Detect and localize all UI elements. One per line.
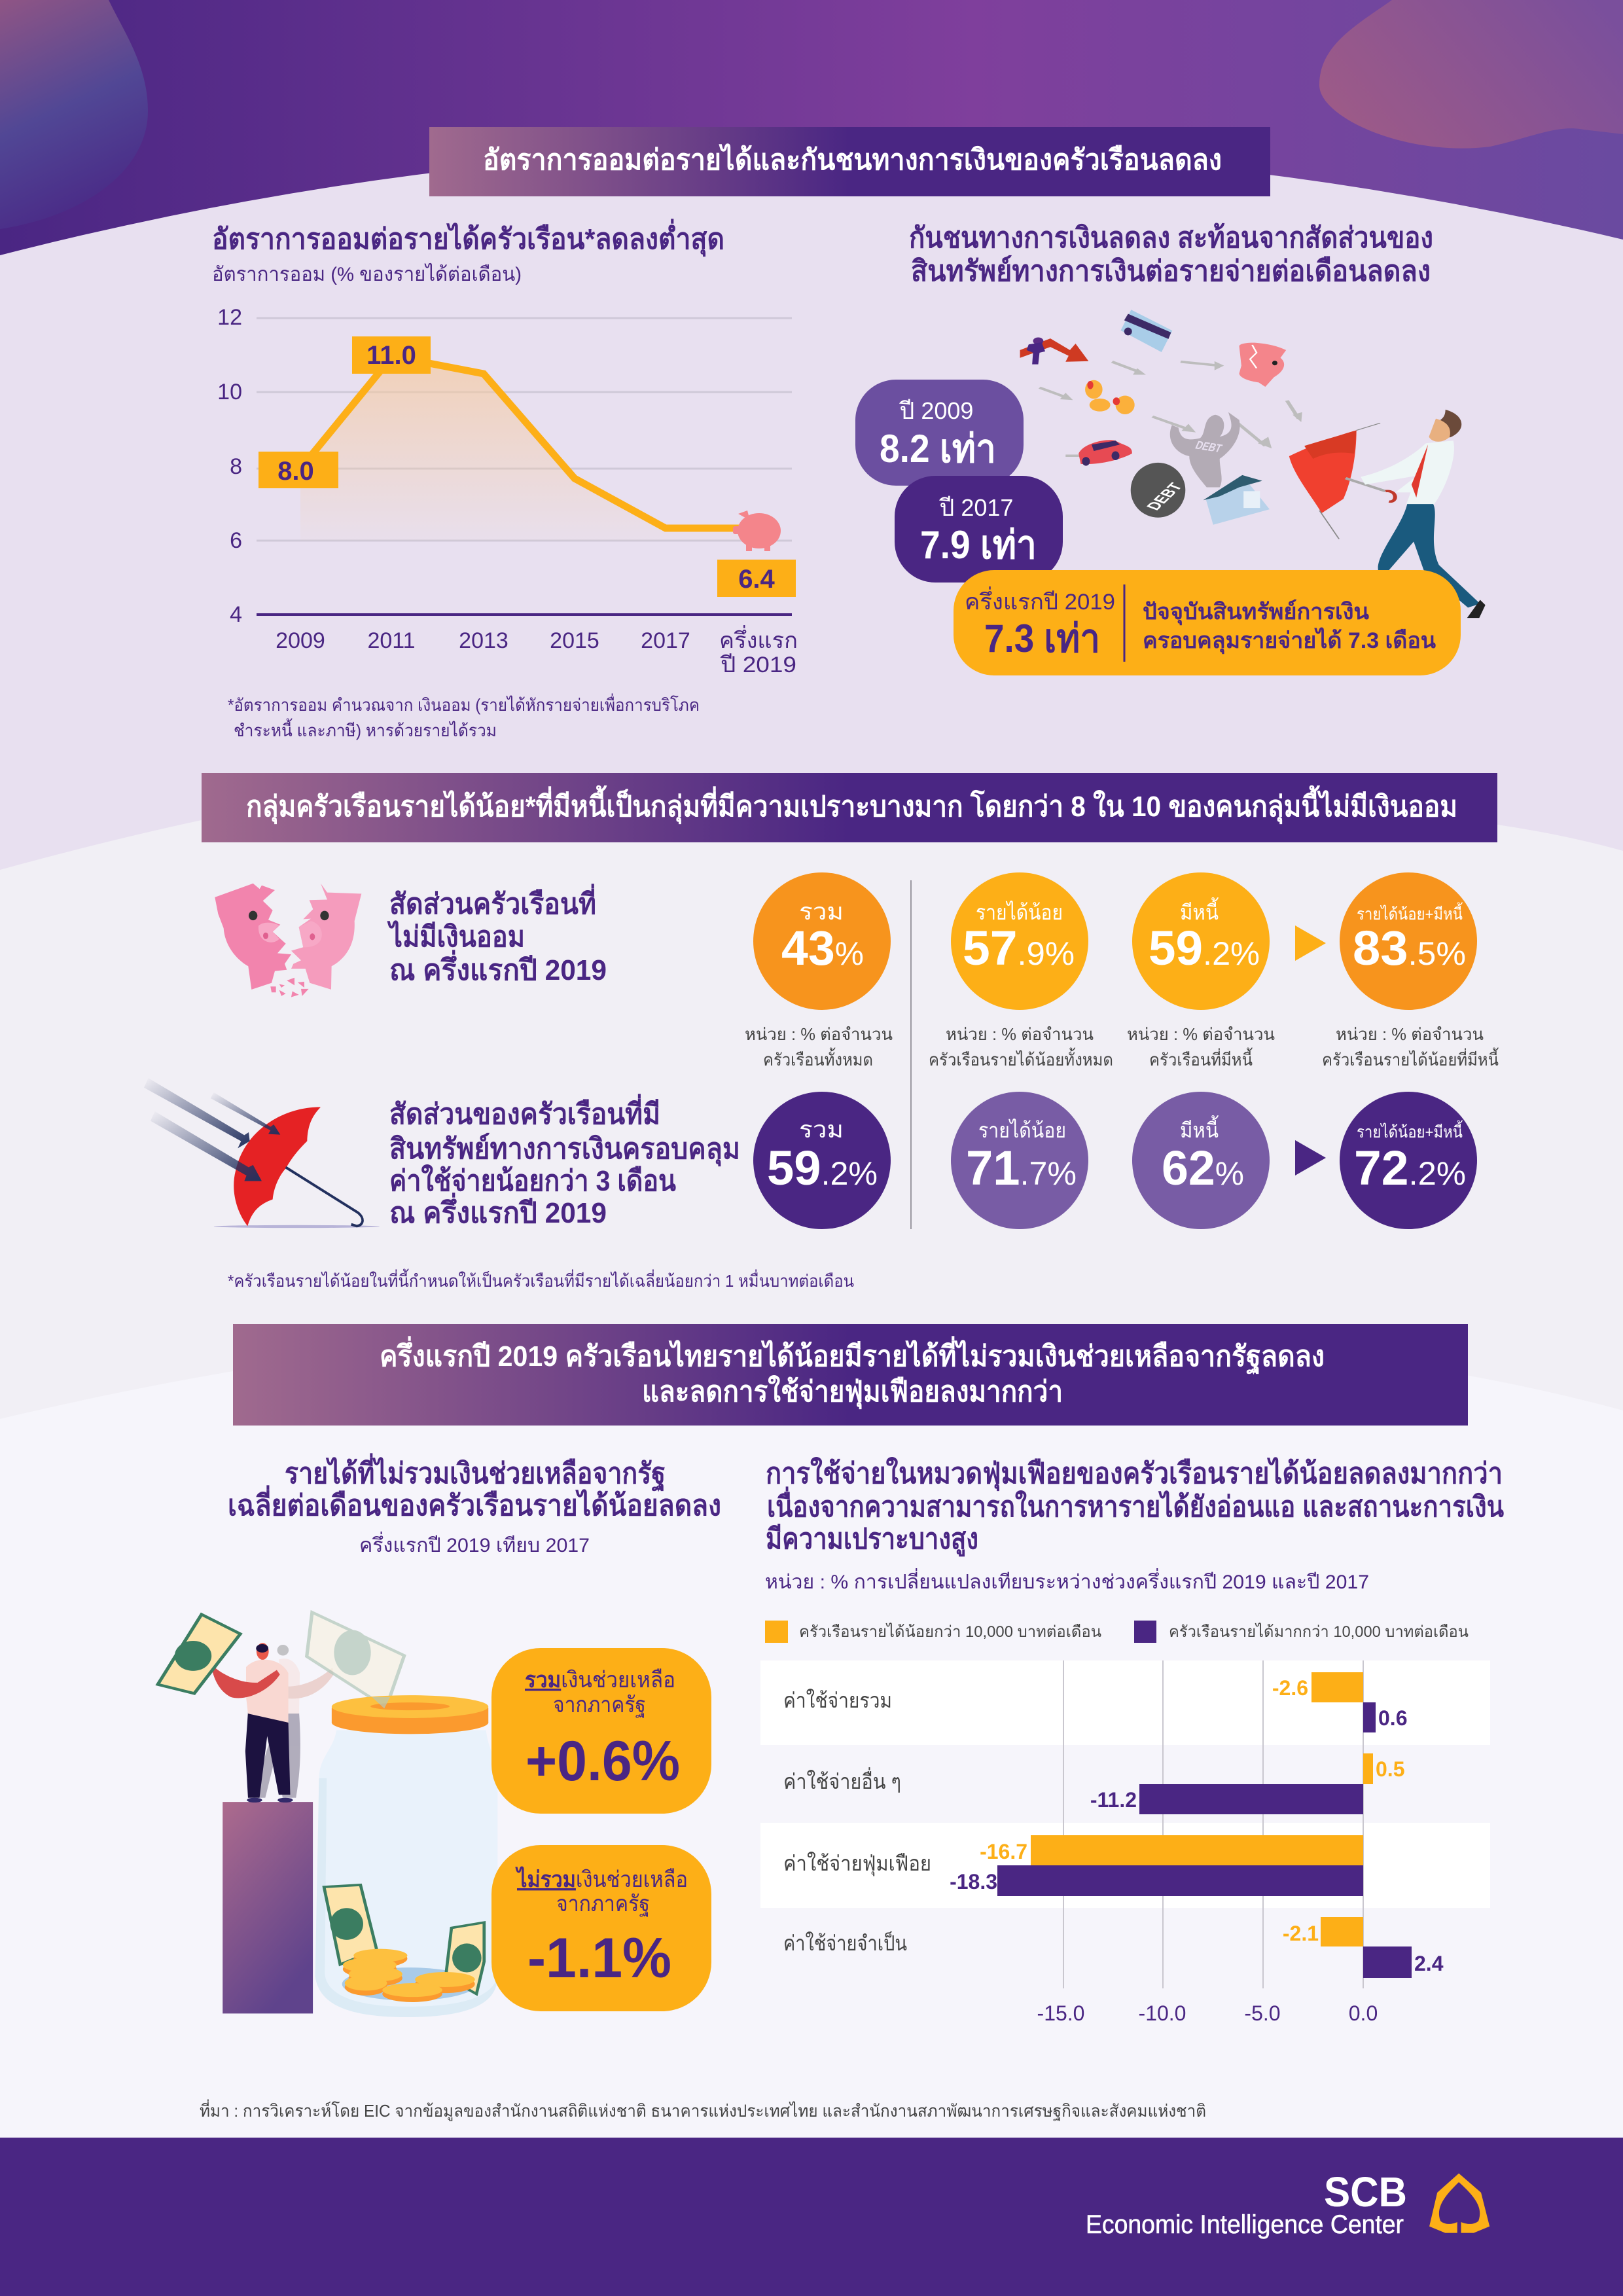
right heading: สินทรัพย์ทางการเงินต่อรายจ่ายต่อเดือนลดลง xyxy=(911,255,1431,287)
icon: debt ball xyxy=(1131,463,1186,518)
pill: 2017 xyxy=(895,476,1063,583)
category labels xyxy=(783,1689,931,1955)
circle: low income and debt 83.5%: 83.5% xyxy=(1353,921,1466,975)
logo text xyxy=(1086,2168,1407,2239)
icon: jar xyxy=(315,1730,497,2017)
callout: including state aid xyxy=(491,1648,711,1814)
circle: has debt 62%: 62% xyxy=(1162,1141,1244,1195)
x-axis labels: -10.0 xyxy=(1139,2001,1186,2025)
category labels: ค่าใช้จ่ายอื่น ๆ xyxy=(783,1767,901,1793)
unit notes xyxy=(745,1024,1499,1069)
y-axis labels: 8 xyxy=(230,454,242,479)
value label 6.4: 6.4 xyxy=(738,565,776,594)
icon: shadow person xyxy=(260,1645,334,1798)
circle: low income 71.7% xyxy=(951,1092,1088,1229)
pill: 2009: ปี 2009 xyxy=(899,397,973,424)
bars: total xyxy=(1272,1672,1407,1732)
icon: car xyxy=(1079,440,1132,466)
y-axis labels: 10 xyxy=(217,380,242,404)
background: light dome xyxy=(0,779,1623,1505)
section header 2: กลุ่มครัวเรือนรายได้น้อย*ที่มีหนี้เป็นกลุ่มที่มีความเปราะบางมาก โดยกว่า 8 ใน 10 ของคนกลุ่มนี้ไม่มีเงินออม xyxy=(246,785,1457,825)
section header 1: อัตราการออมต่อรายได้และกันชนทางการเงินของครัวเรือนลดลง xyxy=(483,143,1222,176)
background: lavender dome xyxy=(0,147,1623,916)
bar chart: spending change xyxy=(760,1660,1490,2025)
icon: faded banknote xyxy=(307,1612,404,1708)
circle: low income 57.9% xyxy=(951,872,1088,1010)
background blob left xyxy=(0,0,148,229)
bars: total: 0.6 xyxy=(1378,1706,1407,1730)
arrow: row 1 xyxy=(1295,925,1326,961)
unit notes: หน่วย : % ต่อจำนวน xyxy=(1336,1024,1484,1044)
circle: total 59.2%: รวม xyxy=(799,1116,844,1143)
y-axis labels: 12 xyxy=(217,305,242,330)
footnote: savings rate: ชำระหนี้ และภาษี) หารด้วยรายได้รวม xyxy=(234,718,497,740)
category labels: ค่าใช้จ่ายรวม xyxy=(783,1689,892,1712)
x-axis labels: 2013 xyxy=(459,628,508,653)
row 2 label: ค่าใช้จ่ายน้อยกว่า 3 เดือน xyxy=(389,1164,676,1197)
x-axis labels: ครึ่งแรก xyxy=(719,625,798,653)
pill: first half 2019: ครอบคลุมรายจ่ายได้ 7.3 เดือน xyxy=(1143,627,1436,655)
x-axis labels: 0.0 xyxy=(1349,2001,1378,2025)
pill: first half 2019 xyxy=(954,570,1461,675)
bars: other: 0.5 xyxy=(1376,1757,1404,1781)
left chart heading: อัตราการออม (% ของรายได้ต่อเดือน) xyxy=(212,262,522,285)
circle: low income 57.9%: รายได้น้อย xyxy=(976,901,1063,924)
pill: first half 2019: ปัจจุบันสินทรัพย์การเงิน xyxy=(1143,599,1369,626)
circle: low income 57.9%: 57.9% xyxy=(963,921,1075,975)
value label 11.0 xyxy=(352,336,431,374)
x-axis labels: -15.0 xyxy=(1037,2001,1084,2025)
pill: 2017: 7.9 เท่า xyxy=(920,523,1037,567)
circle: low income 71.7%: 71.7% xyxy=(966,1141,1077,1195)
icon: credit card xyxy=(1120,310,1172,352)
pill: 2009 xyxy=(855,380,1024,486)
icon: debt figure: DEBT xyxy=(1193,439,1224,456)
y-axis labels: 4 xyxy=(230,602,242,627)
section header 3 xyxy=(233,1324,1468,1426)
icon: pedestal xyxy=(223,1802,313,2013)
x-axis labels: -5.0 xyxy=(1244,2001,1281,2025)
row 1 label: สัดส่วนครัวเรือนที่ xyxy=(389,884,596,920)
row 1 label: ไม่มีเงินออม xyxy=(387,920,525,953)
circle: low income and debt 83.5% xyxy=(1340,872,1477,1010)
row 2 label: สัดส่วนของครัวเรือนที่มี xyxy=(389,1094,660,1130)
bars: luxury: -16.7 xyxy=(980,1840,1027,1863)
icon: debt ball: DEBT xyxy=(1143,480,1186,512)
area under line xyxy=(300,361,756,541)
right heading: spending: หน่วย : % การเปลี่ยนแปลงเทียบระหว่างช่วงครึ่งแรกปี 2019 และปี 2017 xyxy=(765,1568,1369,1593)
y-axis labels xyxy=(217,305,242,627)
row 2 label: ณ ครึ่งแรกปี 2019 xyxy=(389,1193,607,1229)
icon: coins xyxy=(343,1949,475,2002)
unit notes: ครัวเรือนรายได้น้อยทั้งหมด xyxy=(929,1047,1113,1069)
x-axis labels xyxy=(1037,2001,1378,2025)
right heading: spending xyxy=(765,1456,1504,1593)
circle: total 43%: รวม xyxy=(799,898,844,925)
callout: excluding state aid: จากภาครัฐ xyxy=(556,1892,650,1917)
bars: necessary: -2.1 xyxy=(1283,1922,1319,1945)
background: purple top band xyxy=(0,0,1623,458)
divider between total and groups xyxy=(910,880,912,1229)
icon: coins xyxy=(1085,380,1135,414)
bars: luxury: -18.3 xyxy=(950,1870,997,1893)
section header 3: ครึ่งแรกปี 2019 ครัวเรือนไทยรายได้น้อยมีรายได้ที่ไม่รวมเงินช่วยเหลือจากรัฐลดลง xyxy=(380,1336,1325,1374)
right heading: กันชนทางการเงินลดลง สะท้อนจากสัดส่วนของ xyxy=(909,222,1433,254)
unit notes: หน่วย : % ต่อจำนวน xyxy=(1127,1024,1275,1044)
pill: first half 2019: ครึ่งแรกปี 2019 xyxy=(965,586,1115,615)
footer band xyxy=(0,2138,1623,2296)
unit notes: ครัวเรือนที่มีหนี้ xyxy=(1149,1047,1253,1069)
row 1 label xyxy=(387,884,607,986)
icon: gray arrows xyxy=(1039,361,1302,456)
illustration: man with umbrella and flying assets xyxy=(1020,310,1486,618)
row 2 label xyxy=(389,1094,740,1229)
background blob right xyxy=(1319,0,1623,149)
bars: luxury xyxy=(950,1835,1363,1896)
section header 3: และลดการใช้จ่ายฟุ่มเฟือยลงมากกว่า xyxy=(642,1374,1063,1410)
right heading: spending: การใช้จ่ายในหมวดฟุ่มเฟือยของครัวเรือนรายได้น้อยลดลงมากกว่า xyxy=(766,1456,1503,1492)
illustration: person and savings jar xyxy=(158,1612,497,2017)
legend: ครัวเรือนรายได้มากกว่า 10,000 บาทต่อเดือน xyxy=(1169,1623,1469,1641)
circle: low income 71.7%: รายได้น้อย xyxy=(978,1119,1066,1142)
bars: other xyxy=(1090,1753,1404,1814)
footnote: savings rate: *อัตราการออม คำนวณจาก เงินออม (รายได้หักรายจ่ายเพื่อการบริโภค xyxy=(228,693,700,715)
circle: has debt 59.2%: มีหนี้ xyxy=(1180,897,1219,924)
logo text: SCB xyxy=(1324,2168,1407,2215)
left heading: income: เฉลี่ยต่อเดือนของครัวเรือนรายได้น้อยลดลง xyxy=(228,1485,721,1522)
section header 1 xyxy=(429,127,1270,196)
value label 6.4 xyxy=(717,560,796,597)
callout: including state aid: รวมเงินช่วยเหลือ xyxy=(525,1668,675,1693)
circle: has debt 62%: มีหนี้ xyxy=(1180,1115,1219,1142)
circle: has debt 59.2% xyxy=(1132,872,1270,1010)
pill: first half 2019: 7.3 เท่า xyxy=(984,617,1100,660)
callout: including state aid: +0.6% xyxy=(526,1730,680,1793)
icon: debt figure xyxy=(1170,412,1240,487)
row 2 label: สินทรัพย์ทางการเงินครอบคลุม xyxy=(389,1132,740,1167)
x-axis labels: 2015 xyxy=(550,628,599,653)
circle: total 59.2% xyxy=(753,1092,891,1229)
value label 8.0: 8.0 xyxy=(277,457,314,486)
circle: has debt 59.2%: 59.2% xyxy=(1149,921,1260,975)
pill: 2009: 8.2 เท่า xyxy=(880,427,996,471)
category labels: ค่าใช้จ่ายฟุ่มเฟือย xyxy=(783,1852,931,1876)
icon: banknotes in jar xyxy=(324,1885,484,1994)
circle: low income and debt 72.2%: รายได้น้อย+มีหนี้ xyxy=(1357,1120,1463,1141)
icon: broken piggy bank xyxy=(215,884,361,997)
icon: banknote left xyxy=(158,1615,240,1693)
callout: excluding state aid: -1.1% xyxy=(527,1927,671,1990)
x-axis labels: 2011 xyxy=(367,628,416,653)
bars: total: -2.6 xyxy=(1272,1676,1308,1700)
x-axis labels: ปี 2019 xyxy=(720,653,796,677)
bars: other: -11.2 xyxy=(1090,1788,1137,1812)
icon: cracked piggy bank xyxy=(1240,343,1286,387)
icon: jar lid xyxy=(332,1695,488,1734)
callout: excluding state aid: ไม่รวมเงินช่วยเหลือ xyxy=(515,1866,688,1892)
footnote: savings rate xyxy=(228,693,700,740)
value label 11.0: 11.0 xyxy=(366,341,416,370)
value label 8.0 xyxy=(259,452,338,488)
icon: piggy xyxy=(733,511,781,551)
circle: has debt 62% xyxy=(1132,1092,1270,1229)
callout: including state aid: จากภาครัฐ xyxy=(553,1693,646,1718)
circle: low income and debt 72.2%: 72.2% xyxy=(1354,1141,1466,1195)
x-axis labels: 2009 xyxy=(276,628,325,653)
left chart heading: อัตราการออมต่อรายได้ครัวเรือน*ลดลงต่ำสุด xyxy=(212,219,724,257)
icon: umbrella under falling arrows xyxy=(144,1078,380,1228)
unit notes: หน่วย : % ต่อจำนวน xyxy=(745,1024,893,1044)
source note: ที่มา : การวิเคราะห์โดย EIC จากข้อมูลของสำนักงานสถิติแห่งชาติ ธนาคารแห่งประเทศไทย และสำนักงานสภาพัฒนาการเศรษฐกิจและสังคมแห่งชาติ xyxy=(200,2099,1206,2121)
logo icon xyxy=(1429,2174,1489,2233)
row 1 label: ณ ครึ่งแรกปี 2019 xyxy=(389,950,607,986)
icon: person xyxy=(211,1643,293,1803)
right heading: spending: เนื่องจากความสามารถในการหารายได้ยังอ่อนแอ และสถานะการเงิน xyxy=(767,1486,1504,1523)
unit notes: หน่วย : % ต่อจำนวน xyxy=(946,1024,1094,1044)
bars: necessary xyxy=(1283,1917,1444,1978)
bars: necessary: 2.4 xyxy=(1414,1952,1444,1975)
circle: total 43% xyxy=(753,872,891,1010)
left chart heading xyxy=(212,219,724,285)
legend: ครัวเรือนรายได้น้อยกว่า 10,000 บาทต่อเดือน xyxy=(799,1623,1101,1641)
background: palest dome xyxy=(0,1335,1623,2160)
icon: house xyxy=(1203,475,1270,525)
savings line xyxy=(300,361,756,528)
line chart: savings rate xyxy=(217,305,798,677)
circle: low income and debt 72.2% xyxy=(1340,1092,1477,1229)
circle: low income and debt 83.5%: รายได้น้อย+มีหนี้ xyxy=(1357,902,1463,924)
footnote: low income definition: *ครัวเรือนรายได้น้อยในที่นี้กำหนดให้เป็นครัวเรือนที่มีรายได้เฉลี่ยน้อยกว่า 1 หมื่นบาทต่อเดือน xyxy=(228,1268,854,1291)
category labels: ค่าใช้จ่ายจำเป็น xyxy=(783,1931,907,1955)
logo text: Economic Intelligence Center xyxy=(1086,2210,1404,2239)
section header 2 xyxy=(202,773,1497,842)
unit notes: ครัวเรือนรายได้น้อยที่มีหนี้ xyxy=(1322,1047,1499,1069)
left heading: income: รายได้ที่ไม่รวมเงินช่วยเหลือจากรัฐ xyxy=(285,1453,666,1492)
legend xyxy=(765,1621,1469,1643)
y-axis labels: 6 xyxy=(230,528,242,553)
unit notes: ครัวเรือนทั้งหมด xyxy=(763,1047,873,1069)
callout: excluding state aid xyxy=(491,1845,711,2011)
left heading: income xyxy=(228,1453,721,1556)
arrow: row 2 xyxy=(1295,1140,1326,1175)
icon: businessman xyxy=(1361,410,1486,618)
right heading: spending: มีความเปราะบางสูง xyxy=(766,1523,978,1556)
x-axis labels xyxy=(276,625,798,677)
circle: total 59.2%: 59.2% xyxy=(767,1141,878,1195)
right heading xyxy=(909,222,1433,287)
left heading: income: ครึ่งแรกปี 2019 เทียบ 2017 xyxy=(359,1532,590,1556)
circle: total 43%: 43% xyxy=(781,921,864,975)
x-axis labels: 2017 xyxy=(641,628,690,653)
icon: falling arrow with person xyxy=(1020,338,1088,365)
pill: 2017: ปี 2017 xyxy=(939,494,1013,521)
icon: umbrella xyxy=(1289,423,1395,539)
